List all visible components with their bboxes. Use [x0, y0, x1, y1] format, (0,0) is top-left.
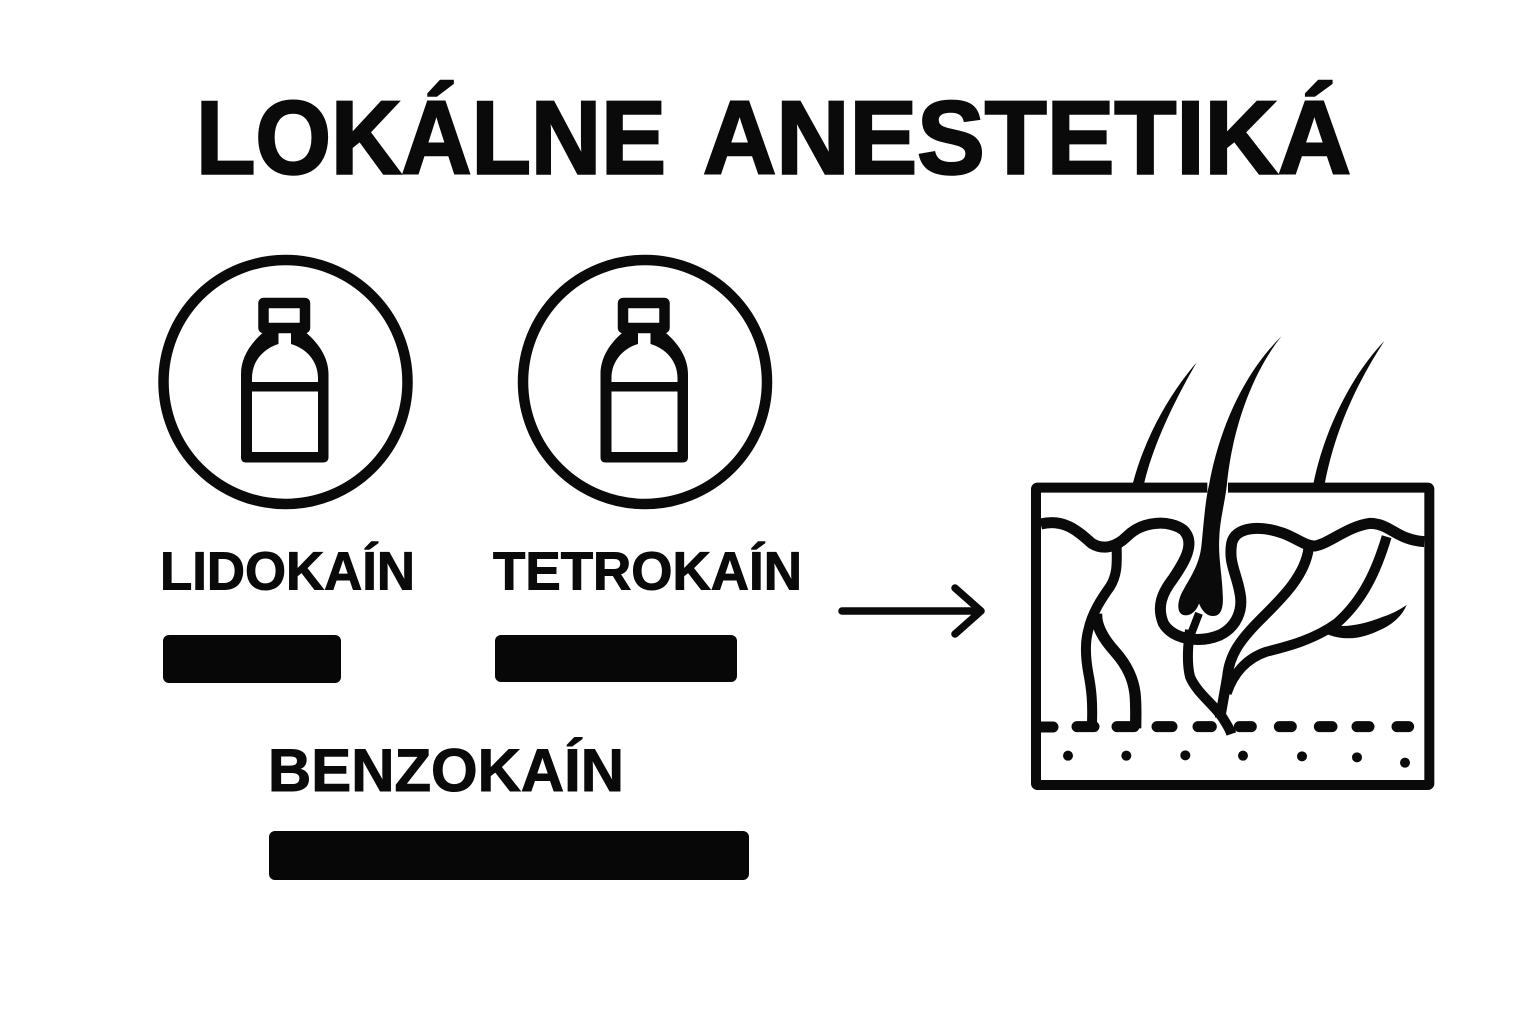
skin block outline	[1036, 488, 1429, 785]
dashed layer line	[1041, 710, 1409, 743]
icon: skin cross-section	[1036, 336, 1429, 785]
arrow	[842, 588, 981, 634]
redacted bar: benzokain	[269, 831, 749, 880]
label: lidokain: LIDOKAÍN	[160, 542, 415, 602]
panel: lidokain	[160, 260, 415, 683]
redacted bar: tetrokain	[495, 635, 737, 682]
label: tetrokain: TETROKAÍN	[493, 542, 802, 602]
title: ANESTETIKÁ	[703, 80, 1351, 196]
title: LOKÁLNE	[196, 80, 666, 196]
left hair	[1133, 362, 1197, 484]
panel: benzokain	[268, 737, 749, 880]
right hair	[1313, 341, 1384, 484]
central nerve	[1191, 613, 1199, 635]
label: benzokain: BENZOKAÍN	[268, 737, 624, 804]
panel: tetrokain	[493, 260, 802, 682]
icon: tetrokain bottle in circle	[523, 260, 767, 504]
small tapered branch	[1327, 605, 1407, 638]
central hair with bulb	[1178, 336, 1282, 616]
dots layer	[1063, 750, 1410, 768]
nerve branches left	[1086, 547, 1136, 728]
title	[196, 80, 1351, 196]
icon: lidokain bottle in circle	[164, 260, 408, 504]
gap around central hair	[1207, 482, 1228, 494]
epidermis line and follicle	[1041, 523, 1424, 639]
right nerves	[1220, 548, 1309, 718]
redacted bar: lidokain	[163, 635, 341, 683]
